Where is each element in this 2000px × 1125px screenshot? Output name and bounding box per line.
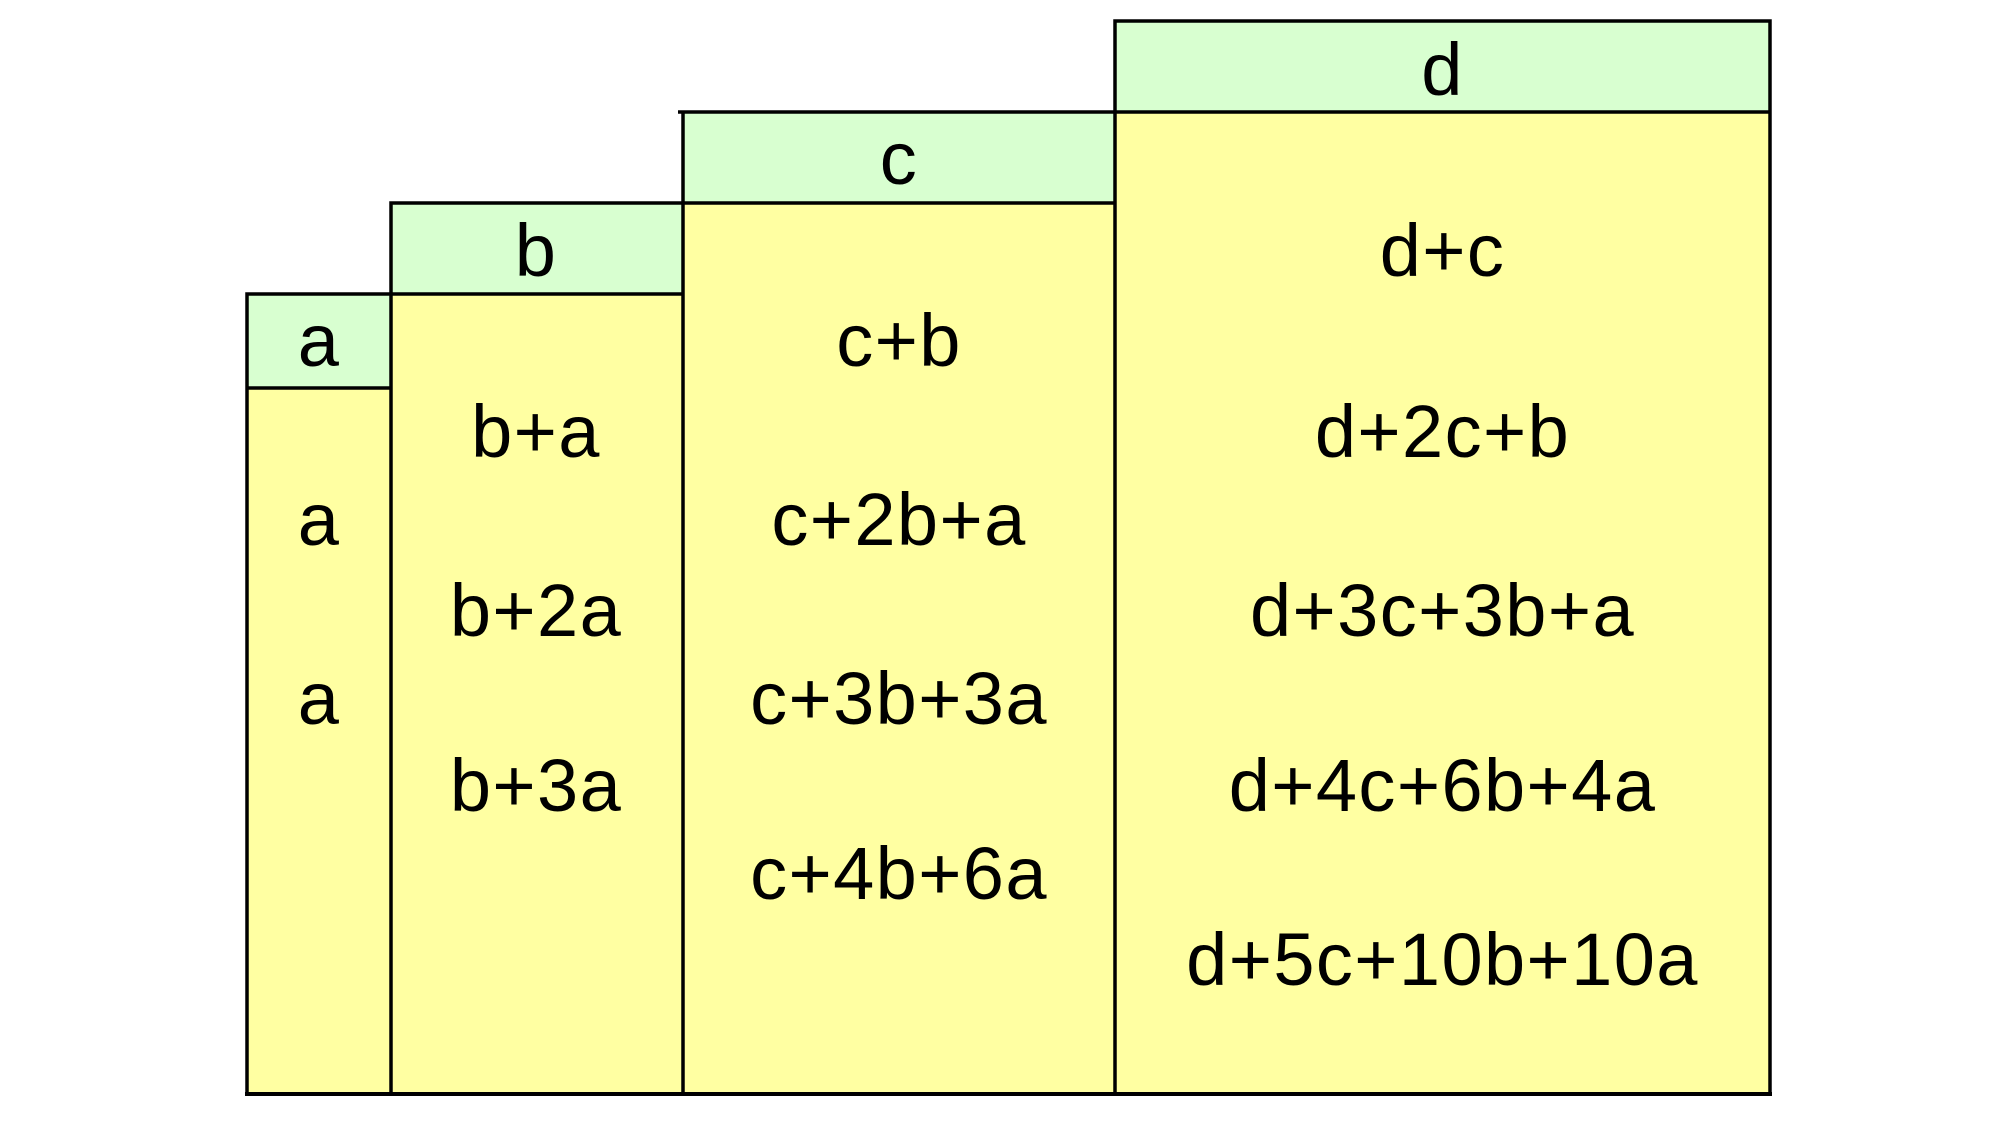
body cell a: a — [298, 657, 340, 740]
body cell d: d+c — [1380, 209, 1505, 292]
column a — [247, 294, 391, 1094]
header cell c — [683, 112, 1115, 203]
body cell a: a — [298, 478, 340, 561]
body cell d — [1115, 112, 1770, 1094]
body cell c — [683, 203, 1115, 1094]
header cell a — [247, 294, 391, 388]
body cell b: b+a — [471, 390, 601, 473]
body cell c: c+3b+3a — [750, 657, 1048, 740]
body cell b: b+2a — [450, 569, 622, 652]
column c — [683, 112, 1115, 1094]
header cell d: d — [1421, 28, 1464, 111]
body cell d: d+3c+3b+a — [1250, 569, 1635, 652]
column d — [1115, 21, 1770, 1094]
body cell c: c+2b+a — [771, 478, 1027, 561]
body cell d: d+5c+10b+10a — [1186, 918, 1699, 1001]
header cell b: b — [515, 209, 557, 292]
header cell a: a — [298, 299, 340, 382]
body cell c: c+b — [836, 299, 962, 382]
header cell b — [391, 203, 683, 294]
body cell c: c+4b+6a — [750, 832, 1048, 915]
header cell c: c — [880, 117, 918, 200]
header cell d — [1115, 21, 1770, 112]
body cell b: b+3a — [450, 744, 622, 827]
body cell d: d+2c+b — [1315, 390, 1570, 473]
body cell a — [247, 388, 391, 1094]
body cell b — [391, 294, 683, 1094]
table grid lines — [245, 21, 1772, 1094]
body cell d: d+4c+6b+4a — [1229, 744, 1656, 827]
column b — [391, 203, 683, 1094]
